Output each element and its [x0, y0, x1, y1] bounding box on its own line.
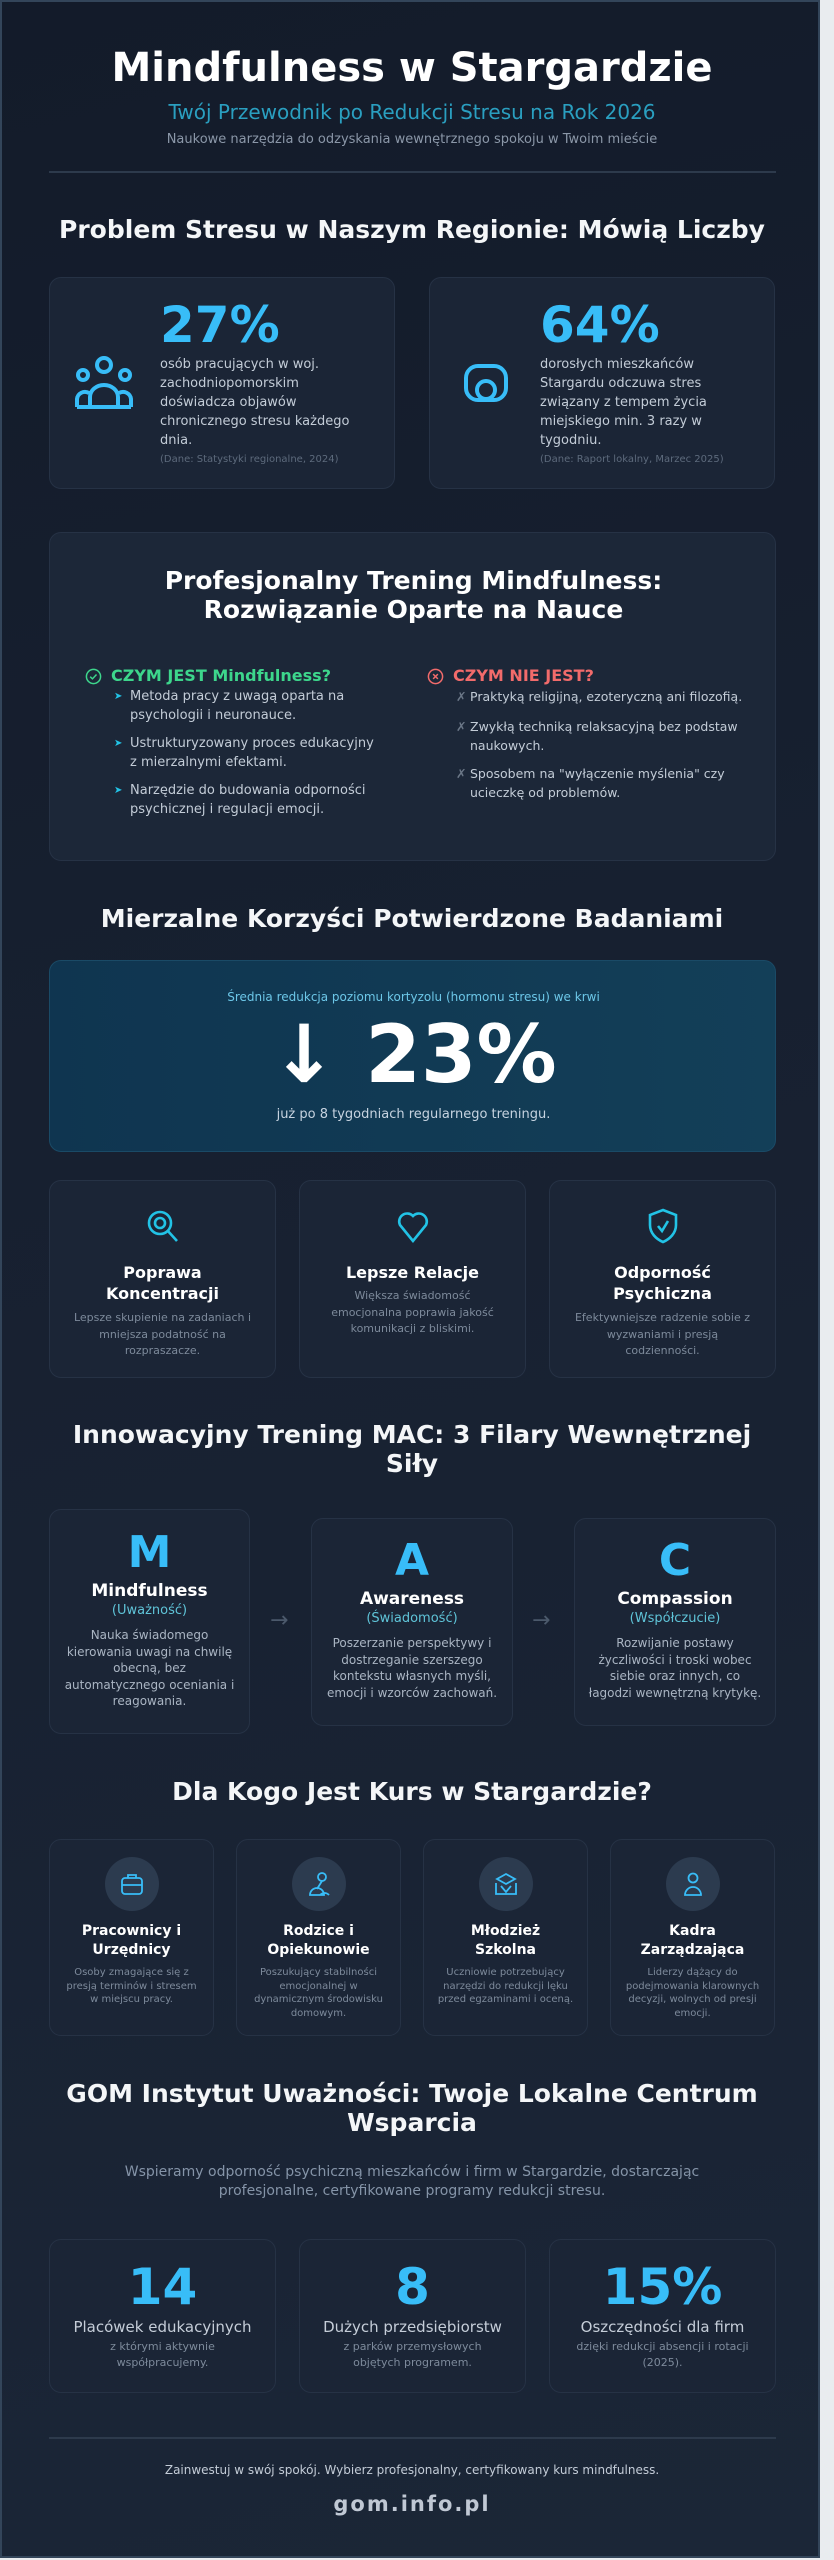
bullets: Metoda pracy z uwagą oparta na psychologii i neuronauce.	[130, 689, 344, 723]
heading: GOM: GOM Instytut Uważności: Twoje Lokalne Centrum	[66, 2079, 758, 2108]
audience text: Poszukujący stabilności emocjonalnej w dynamicznym środowisku domowym.	[254, 1967, 383, 2018]
audience title: Opiekunowie	[267, 1942, 370, 1958]
pillar text: Poszerzanie perspektywy i dostrzeganie szerszego kontekstu własnych myśli, emocji i wzorców zachowań.	[327, 1636, 497, 1700]
pillar text: Nauka świadomego kierowania uwagi na chwilę obecną, bez automatycznego oceniania i reagowania.	[65, 1628, 234, 1708]
bullets	[114, 689, 374, 817]
sub: (2025).	[642, 2356, 683, 2369]
audience title: Szkolna	[475, 1942, 536, 1958]
benefit card: resilience	[549, 1180, 776, 1378]
footer url: gom.info.pl	[333, 2492, 491, 2516]
audience text: Uczniowie potrzebujący narzędzi do redukcji lęku przed egzaminami i oceną.	[438, 1967, 573, 2005]
sub: z parków przemysłowych	[343, 2340, 482, 2353]
column: is not	[428, 666, 742, 800]
stat text: dorosłych mieszkańców Stargardu odczuwa stres związany z tempem życia miejskiego min. 3 razy w tygodniu.	[540, 357, 707, 448]
letter: A	[395, 1535, 429, 1586]
pillar text: łagodzi wewnętrzną krytykę.	[589, 1686, 761, 1700]
audience title: Pracownicy i	[82, 1923, 181, 1939]
label: Oszczędności dla firm	[581, 2318, 744, 2336]
letter: M	[128, 1527, 171, 1578]
column: is	[86, 666, 374, 817]
pillar title: Compassion	[617, 1589, 733, 1609]
stat: 8	[299, 2239, 526, 2393]
highlight box: cortisol	[49, 960, 776, 1152]
audience title: Rodzice i	[283, 1923, 354, 1939]
audience: workers	[49, 1839, 214, 2036]
benefit card: relations	[299, 1180, 526, 1378]
panel heading: Profesjonalny Trening Mindfulness:	[165, 566, 662, 595]
column: is not: ✗	[456, 766, 466, 781]
sub	[343, 2340, 482, 2369]
footer text: Zainwestuj w swój spokój. Wybierz profesjonalny, certyfikowany kurs mindfulness.	[165, 2463, 659, 2477]
pillar C	[574, 1518, 776, 1726]
intro paragraph	[125, 2164, 699, 2199]
pillar text: życzliwości i troski wobec	[598, 1652, 752, 1666]
heading: MAC	[73, 1420, 751, 1478]
bullets: Sposobem na "wyłączenie myślenia" czy ucieczkę od problemów.	[470, 766, 725, 800]
benefit text: Efektywniejsze radzenie sobie z wyzwaniami i presją codzienności.	[575, 1311, 750, 1357]
source: (Dane: Raport lokalny, Marzec 2025)	[540, 454, 724, 465]
audience text: Osoby zmagające się z presją terminów i stresem w miejscu pracy.	[66, 1967, 197, 2005]
icon: person	[666, 1857, 720, 1911]
audience: youth	[423, 1839, 588, 2036]
audience title: Kadra	[669, 1923, 716, 1939]
column: is not: ✗	[456, 719, 466, 734]
bullets: Zwykłą techniką relaksacyjną bez podstaw naukowych.	[470, 719, 738, 753]
heading: GOM	[66, 2079, 758, 2137]
number: 14	[128, 2258, 197, 2316]
stat: 15%	[549, 2239, 776, 2393]
audience title: Młodzież	[471, 1923, 540, 1939]
panel heading	[165, 566, 662, 624]
icon: ring	[464, 364, 508, 402]
audience title	[641, 1923, 744, 1958]
big number: ↓ 23%	[270, 1008, 557, 1101]
intro paragraph: profesjonalne, certyfikowane programy redukcji stresu.	[219, 2183, 605, 2199]
icon: magnifier	[148, 1210, 178, 1242]
sub	[576, 2340, 749, 2369]
bullets	[456, 689, 742, 800]
stat card 27%	[49, 277, 395, 489]
audience title	[267, 1923, 370, 1958]
benefit title: Lepsze Relacje	[346, 1263, 479, 1282]
heading: MAC: Innowacyjny Trening MAC: 3 Filary Wewnętrznej	[73, 1420, 751, 1449]
column heading: CZYM NIE JEST?	[453, 666, 594, 685]
intro paragraph: Wspieramy odporność psychiczną mieszkańców i firm w Stargardzie, dostarczając	[125, 2164, 699, 2180]
sub: dzięki redukcji absencji i rotacji	[576, 2340, 749, 2353]
stat text: osób pracujących w woj. zachodniopomorskim doświadcza objawów chronicznego stresu każdego dnia.	[160, 357, 349, 448]
column: is: ➤	[114, 691, 122, 702]
stat number: 64%	[540, 296, 660, 354]
letter: C	[659, 1535, 691, 1586]
stat: 14	[49, 2239, 276, 2393]
caption: Średnia redukcja poziomu kortyzolu (hormonu stresu) we krwi	[227, 990, 600, 1004]
heading: audience: Dla Kogo Jest Kurs w Stargardzie?	[172, 1777, 652, 1806]
pillar title: Awareness	[360, 1589, 464, 1609]
number: 8	[395, 2258, 430, 2316]
bullets: Narzędzie do budowania odporności psychicznej i regulacji emocji.	[130, 783, 366, 817]
icon: people	[75, 356, 133, 409]
heading: problem: Problem Stresu w Naszym Regionie: Mówią Liczby	[59, 215, 765, 244]
note: już po 8 tygodniach regularnego treningu.	[277, 1107, 550, 1122]
pillar title: Mindfulness	[91, 1581, 208, 1601]
bullets: Praktyką religijną, ezoteryczną ani filozofią.	[470, 689, 742, 704]
audience title	[82, 1923, 181, 1958]
arrow: →	[270, 1608, 288, 1633]
sub: współpracujemy.	[117, 2356, 208, 2369]
heading: MAC: Siły	[386, 1449, 438, 1478]
column heading: CZYM JEST Mindfulness?	[111, 666, 331, 685]
label: Placówek edukacyjnych	[73, 2318, 252, 2336]
icon: heart	[398, 1212, 428, 1243]
benefit title: Psychiczna	[613, 1284, 712, 1303]
icon: parent	[292, 1857, 346, 1911]
panel heading: Rozwiązanie Oparte na Nauce	[204, 595, 623, 624]
pillar text: siebie oraz innych, co	[610, 1669, 740, 1683]
benefit title: Poprawa	[123, 1263, 202, 1282]
audience title: Zarządzająca	[641, 1942, 744, 1958]
column: is: ➤	[114, 738, 122, 749]
pillar text	[588, 1636, 761, 1700]
benefit title: Koncentracji	[106, 1284, 219, 1303]
stat number: 27%	[160, 296, 280, 354]
stat card 64%	[429, 277, 775, 489]
column: is: ➤	[114, 785, 122, 796]
benefit text: Większa świadomość emocjonalna poprawia jakość komunikacji z bliskimi.	[331, 1289, 494, 1335]
pillar text: Rozwijanie postawy	[616, 1636, 734, 1650]
benefit title: Odporność	[614, 1263, 711, 1282]
icon: graduation	[478, 1857, 532, 1911]
number: 15%	[603, 2258, 722, 2316]
icon: shield	[648, 1208, 678, 1244]
audience: parents	[236, 1839, 401, 2036]
label: Dużych przedsiębiorstw	[323, 2318, 502, 2336]
tagline: Naukowe narzędzia do odzyskania wewnętrznego spokoju w Twoim mieście	[167, 132, 657, 147]
title: Mindfulness w Stargardzie	[112, 45, 712, 91]
pillar A	[311, 1518, 513, 1726]
benefit text: Lepsze skupienie na zadaniach i mniejsza podatność na rozpraszacze.	[74, 1311, 251, 1357]
benefit title	[106, 1263, 219, 1303]
sub	[110, 2340, 215, 2369]
heading: benefits: Mierzalne Korzyści Potwierdzone Badaniami	[101, 904, 723, 933]
pillar M	[49, 1509, 250, 1734]
benefit title	[613, 1263, 712, 1303]
icon: briefcase	[104, 1857, 158, 1911]
source: (Dane: Statystyki regionalne, 2024)	[160, 454, 339, 465]
column: is not: ✗	[456, 689, 466, 704]
sub: objętych programem.	[353, 2356, 472, 2369]
bullets: Ustrukturyzowany proces edukacyjny z mierzalnymi efektami.	[130, 736, 374, 770]
benefit card: concentration	[49, 1180, 276, 1378]
audience title: Urzędnicy	[92, 1942, 171, 1958]
audience title	[471, 1923, 540, 1958]
heading: GOM: Wsparcia	[347, 2108, 477, 2137]
subtitle: Twój Przewodnik po Redukcji Stresu na Rok 2026	[168, 100, 656, 124]
pillar subtitle: (Współczucie)	[630, 1611, 720, 1626]
sub: z którymi aktywnie	[110, 2340, 215, 2353]
audience: managers	[610, 1839, 775, 2036]
pillar subtitle: (Uważność)	[112, 1603, 187, 1618]
arrow: →	[532, 1608, 550, 1633]
audience text: Liderzy dążący do podejmowania klarownych decyzji, wolnych od presji emocji.	[626, 1967, 759, 2018]
panel: what is mindfulness	[49, 532, 776, 861]
pillar subtitle: (Świadomość)	[366, 1611, 458, 1626]
